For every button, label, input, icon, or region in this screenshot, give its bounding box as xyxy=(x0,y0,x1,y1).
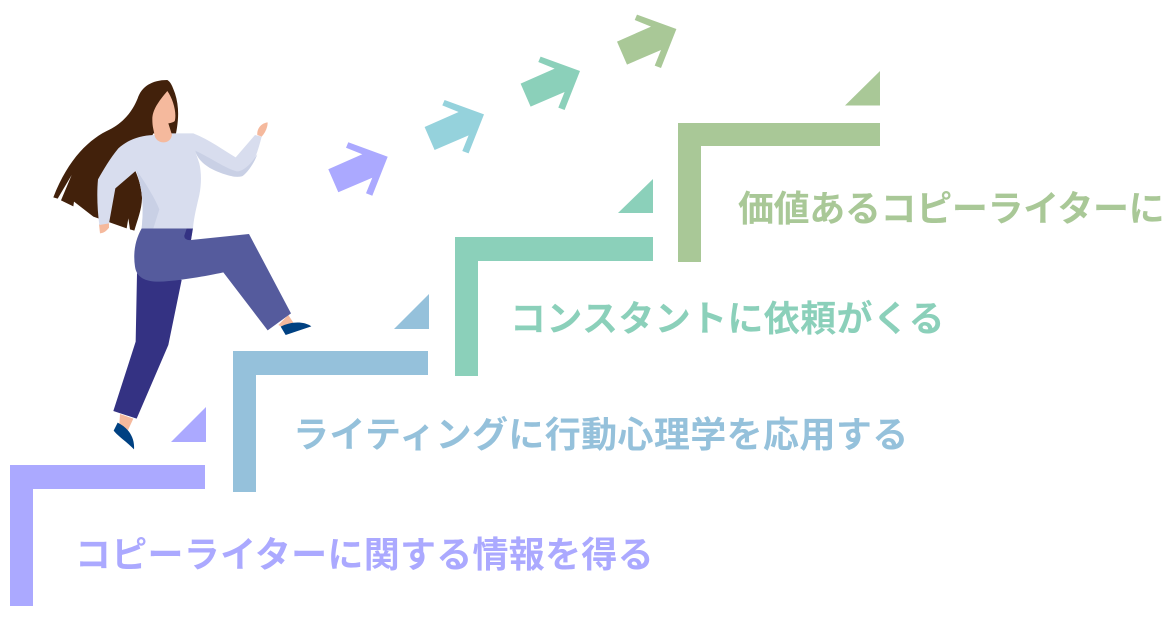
step 1 triangle xyxy=(171,407,206,442)
hand left xyxy=(99,223,109,233)
step 4 triangle xyxy=(845,71,880,106)
arrow 1 xyxy=(328,142,388,196)
step 2: bracket, triangle and label xyxy=(233,294,909,492)
back foot skin xyxy=(119,414,133,432)
shirt shadow sleeve xyxy=(195,151,257,177)
step 3 triangle xyxy=(618,179,653,213)
step 3 label: コンスタントに依頼がくる xyxy=(510,298,945,339)
pocket xyxy=(184,229,193,240)
step 4 bracket xyxy=(678,123,880,262)
hips and raised leg xyxy=(134,228,291,330)
face and neck xyxy=(152,91,175,142)
step 2 label: ライティングに行動心理学を応用する xyxy=(293,414,909,455)
hand right xyxy=(257,122,268,137)
arrow 3 xyxy=(521,57,580,110)
front shoe xyxy=(281,322,311,335)
step 2 bracket xyxy=(233,351,428,492)
step 3 bracket xyxy=(455,237,653,376)
woman climbing the steps xyxy=(53,80,311,449)
arrow 4 xyxy=(617,15,676,68)
step 4: bracket, triangle and label xyxy=(678,71,1164,262)
step 3: bracket, triangle and label xyxy=(455,179,945,376)
step 1: bracket, triangle and label xyxy=(10,407,654,606)
step 1 bracket xyxy=(10,465,205,606)
arrow 2 xyxy=(425,100,484,153)
step 2 triangle xyxy=(394,294,429,329)
hair xyxy=(53,80,178,231)
back shoe xyxy=(114,423,134,449)
front foot skin xyxy=(278,315,293,328)
shirt xyxy=(97,133,262,228)
back leg xyxy=(113,270,182,419)
step 1 label: コピーライターに関する情報を得る xyxy=(75,534,654,575)
shirt shadow body xyxy=(136,169,159,228)
step 4 label: 価値あるコピーライターに xyxy=(738,188,1164,229)
